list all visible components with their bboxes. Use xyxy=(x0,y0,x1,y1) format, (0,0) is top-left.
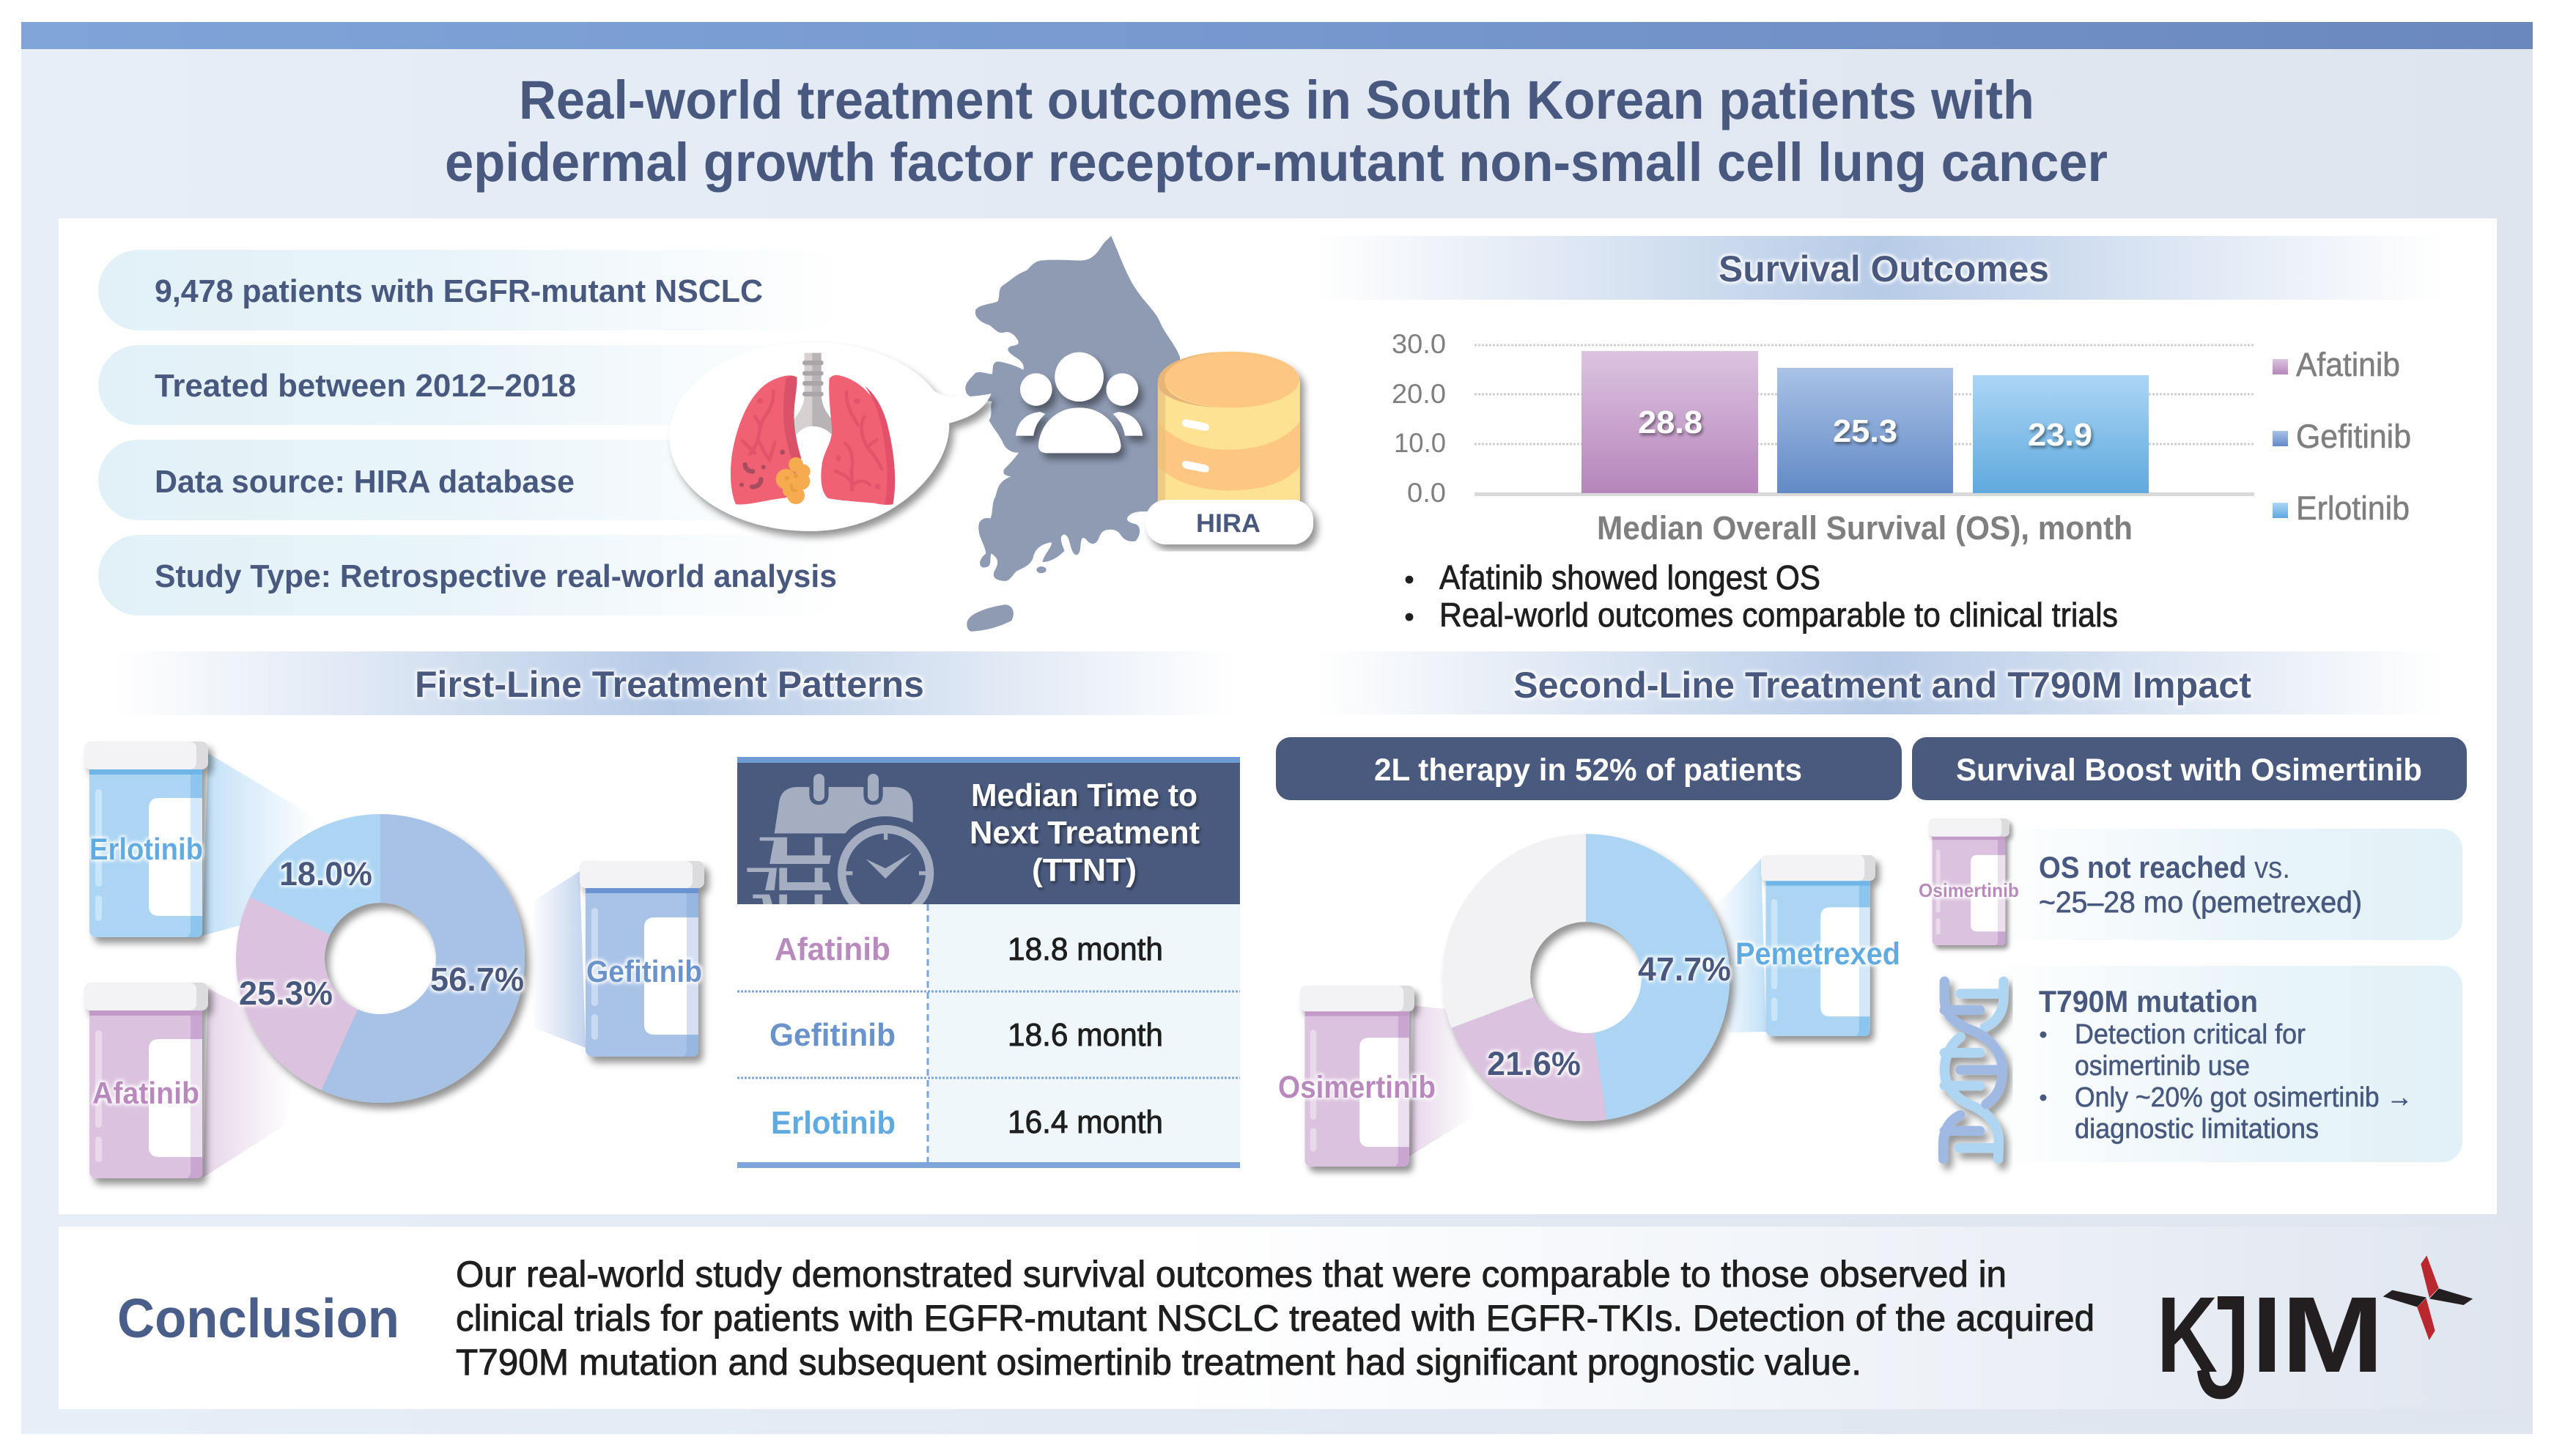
row: Erlotinib xyxy=(771,1104,1163,1141)
conclusion heading: Conclusion xyxy=(117,1287,399,1349)
pill: study type: Study Type: Retrospective real-world analysis xyxy=(155,558,837,594)
legend: Afatinib xyxy=(2296,346,2400,383)
conclusion text: T790M mutation and subsequent osimertinib treatment had significant prognostic value. xyxy=(456,1342,1861,1383)
second-line beams xyxy=(1409,859,1766,1156)
card: T790M mutation xyxy=(1944,966,2462,1162)
island: small xyxy=(1036,566,1047,573)
section heading: Survival Outcomes xyxy=(1315,236,2442,300)
logo: KJIM: J xyxy=(2196,1266,2251,1427)
main white panel xyxy=(59,218,2497,1214)
row: Gefitinib: 18.6 month xyxy=(1008,1017,1163,1053)
icon: tumour xyxy=(776,457,811,504)
bar chart: median overall survival xyxy=(1392,329,2411,547)
donut chart: second-line therapy share xyxy=(1442,834,1731,1121)
title: epidermal growth factor receptor-mutant non-small cell lung cancer xyxy=(445,132,2108,193)
icon: HIRA database cylinder xyxy=(1158,352,1300,506)
survival key points: Real-world outcomes comparable to clinical trials xyxy=(1439,596,2118,634)
pill: study type xyxy=(98,535,846,616)
table value column background xyxy=(928,904,1240,1162)
bottle: Erlotinib xyxy=(84,742,208,937)
table header xyxy=(737,763,1240,904)
conclusion text xyxy=(456,1254,2094,1383)
row: Gefitinib xyxy=(769,1017,1163,1053)
bottle: Pemetrexed xyxy=(1735,855,1900,1036)
top accent bar xyxy=(21,22,2533,49)
row: Erlotinib: Erlotinib xyxy=(771,1105,896,1141)
y axis labels: 10.0 xyxy=(1394,428,1446,458)
bar: Gefitinib: 25.3 xyxy=(1833,413,1897,449)
HIRA label xyxy=(1145,500,1313,544)
HIRA label: HIRA xyxy=(1196,509,1261,538)
donut labels xyxy=(1487,950,1731,1082)
card text: OS not reached vs. xyxy=(2039,850,2290,884)
bottle: Osimertinib: Osimertinib xyxy=(1278,1070,1436,1105)
table header text xyxy=(970,777,1200,888)
first-line beams xyxy=(202,753,586,1178)
icon: lungs with tumour xyxy=(731,353,895,505)
bar: Erlotinib xyxy=(1973,375,2149,493)
section heading: First-Line Treatment Patterns: First-Line Treatment Patterns xyxy=(415,664,924,705)
logo: KJIM: K xyxy=(2157,1275,2218,1395)
callout: lung bubble xyxy=(669,342,992,531)
conclusion text: clinical trials for patients with EGFR-mutant NSCLC treated with EGFR-TKIs. Detection of the acquired xyxy=(456,1298,2094,1339)
table header text: Median Time to xyxy=(971,777,1197,813)
legend: Gefitinib xyxy=(2296,418,2411,455)
row: Afatinib: Afatinib xyxy=(775,931,890,967)
bottle: Gefitinib xyxy=(580,861,704,1057)
header: Survival Boost with Osimertinib: Survival Boost with Osimertinib xyxy=(1956,753,2422,788)
table header text: (TTNT) xyxy=(1032,852,1137,888)
pill: patients: 9,478 patients with EGFR-mutant NSCLC xyxy=(155,273,763,309)
pill: data source: Data source: HIRA database xyxy=(155,464,575,500)
panel: study overview pills xyxy=(98,250,846,616)
pill: data source xyxy=(98,440,846,520)
icon: calendar and clock xyxy=(747,774,930,917)
card text: diagnostic limitations xyxy=(2075,1114,2319,1145)
icon: DNA helix xyxy=(1944,981,2004,1159)
donut labels xyxy=(239,855,524,1012)
section heading: Survival Outcomes: Survival Outcomes xyxy=(1719,248,2049,289)
y axis labels: 30.0 xyxy=(1392,329,1446,359)
survival key points: Afatinib showed longest OS xyxy=(1439,558,1820,596)
bottle: Afatinib xyxy=(84,983,208,1178)
title xyxy=(445,70,2108,193)
bar: Gefitinib xyxy=(1777,368,1953,493)
row: Erlotinib: 16.4 month xyxy=(1008,1104,1163,1140)
survival key points xyxy=(1406,558,2118,634)
panel: conclusion xyxy=(59,1227,2533,1427)
conclusion text: Our real-world study demonstrated survival outcomes that were comparable to those observed in xyxy=(456,1254,2007,1295)
logo: KJIM: I xyxy=(2252,1275,2282,1395)
pill: patients xyxy=(98,250,846,330)
header: 2L therapy xyxy=(1276,737,1902,800)
header: 2L therapy: 2L therapy in 52% of patients xyxy=(1374,753,1802,788)
table top stripe xyxy=(737,757,1240,763)
bar: Afatinib: 28.8 xyxy=(1638,404,1702,440)
section heading: Second-Line Treatment and T790M Impact: Second-Line Treatment and T790M Impact xyxy=(1513,665,2251,706)
card text: Only ~20% got osimertinib → xyxy=(2075,1082,2413,1113)
bar: Afatinib xyxy=(1582,351,1758,493)
section heading: First-Line Treatment Patterns xyxy=(111,651,1236,715)
card text xyxy=(2039,850,2362,919)
card text: Detection critical for xyxy=(2075,1019,2306,1050)
pill: treatment period xyxy=(98,345,846,425)
legend xyxy=(2273,346,2411,527)
donut labels: 18.0% xyxy=(279,855,372,893)
bottle: Gefitinib: Gefitinib xyxy=(586,954,702,988)
bottle: small Osimertinib xyxy=(1919,818,2019,945)
card text: osimertinib use xyxy=(2075,1051,2250,1082)
row: Afatinib xyxy=(775,931,1163,967)
header: Survival Boost with Osimertinib xyxy=(1912,737,2467,800)
bottle: Afatinib: Afatinib xyxy=(92,1076,199,1110)
table: median time to next treatment xyxy=(737,757,1240,1168)
donut labels: 47.7% xyxy=(1638,950,1731,988)
logo: KJIM: M xyxy=(2281,1275,2384,1395)
icon: group of people xyxy=(1016,352,1143,453)
table header text: Next Treatment xyxy=(970,815,1200,851)
y axis labels xyxy=(1392,329,1446,508)
card text: ~25–28 mo (pemetrexed) xyxy=(2039,885,2362,919)
map of South Korea xyxy=(965,236,1184,632)
donut labels: 21.6% xyxy=(1487,1045,1581,1082)
donut labels: 56.7% xyxy=(430,961,524,998)
row: Gefitinib: Gefitinib xyxy=(769,1017,896,1053)
donut chart: first-line treatment share xyxy=(236,814,525,1103)
bottle: Erlotinib: Erlotinib xyxy=(89,832,203,866)
bottle: Pemetrexed: Pemetrexed xyxy=(1735,936,1900,972)
island: Jeju xyxy=(967,605,1014,632)
card text xyxy=(2039,984,2413,1145)
section heading: Second-Line Treatment and T790M Impact xyxy=(1315,651,2442,714)
donut labels: 25.3% xyxy=(239,975,333,1012)
pill: treatment period: Treated between 2012–2018 xyxy=(155,368,576,404)
card text: T790M mutation xyxy=(2039,984,2258,1019)
gridlines xyxy=(1475,345,2254,444)
logo: KJIM xyxy=(2157,1255,2473,1427)
bottle: small Osimertinib: Osimertinib xyxy=(1919,879,2019,901)
legend: Erlotinib xyxy=(2296,489,2410,527)
y axis labels: 0.0 xyxy=(1407,478,1446,508)
row: Afatinib: 18.8 month xyxy=(1008,931,1163,967)
card: OS not reached xyxy=(1919,818,2462,945)
chart axis title: Median Overall Survival (OS), month xyxy=(1597,509,2133,547)
title: Real-world treatment outcomes in South Korean patients with xyxy=(519,70,2034,130)
bar: Erlotinib: 23.9 xyxy=(2028,417,2092,453)
bottle: Osimertinib xyxy=(1278,986,1436,1167)
y axis labels: 20.0 xyxy=(1392,379,1446,409)
